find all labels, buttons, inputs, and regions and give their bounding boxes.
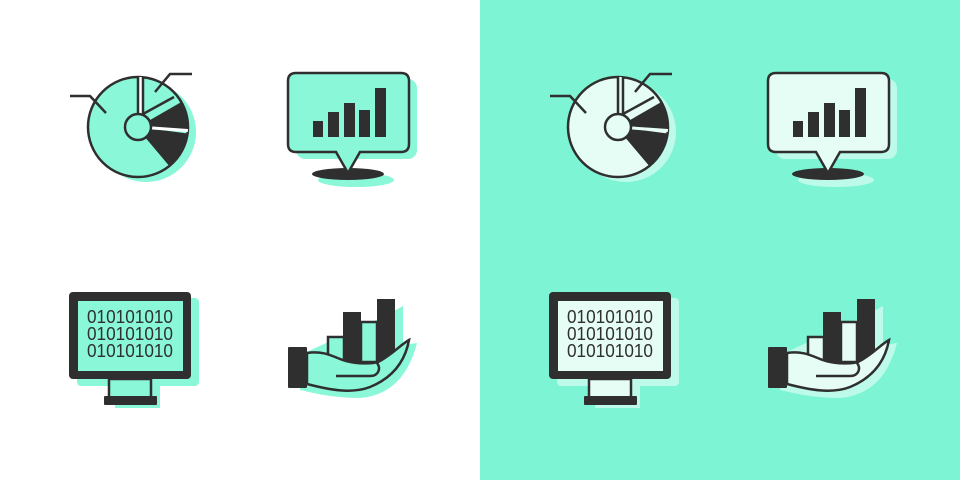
icon: chat bubble with bar chart	[288, 73, 417, 187]
icon: pie chart (mint)	[550, 74, 676, 182]
icon: chat bubble with bar chart (mint)	[768, 73, 897, 187]
icon: monitor with binary code	[69, 292, 199, 408]
icon: monitor with binary code (mint): 010101010	[567, 341, 653, 361]
icon: hand holding bar chart (mint)	[768, 299, 897, 398]
icon set: right (mint background)	[549, 73, 897, 408]
icon: hand holding bar chart	[288, 299, 417, 398]
right background panel	[480, 0, 960, 480]
icon: pie chart	[70, 74, 196, 182]
icon: monitor with binary code (mint)	[549, 292, 679, 408]
icon: monitor with binary code: 010101010	[87, 341, 173, 361]
icon set: left (white background)	[69, 73, 417, 408]
icon: monitor with binary code: 010101010	[87, 307, 173, 327]
icon: monitor with binary code (mint): 010101010	[567, 307, 653, 327]
icon: monitor with binary code: 010101010	[87, 324, 173, 344]
icon: monitor with binary code (mint): 010101010	[567, 324, 653, 344]
